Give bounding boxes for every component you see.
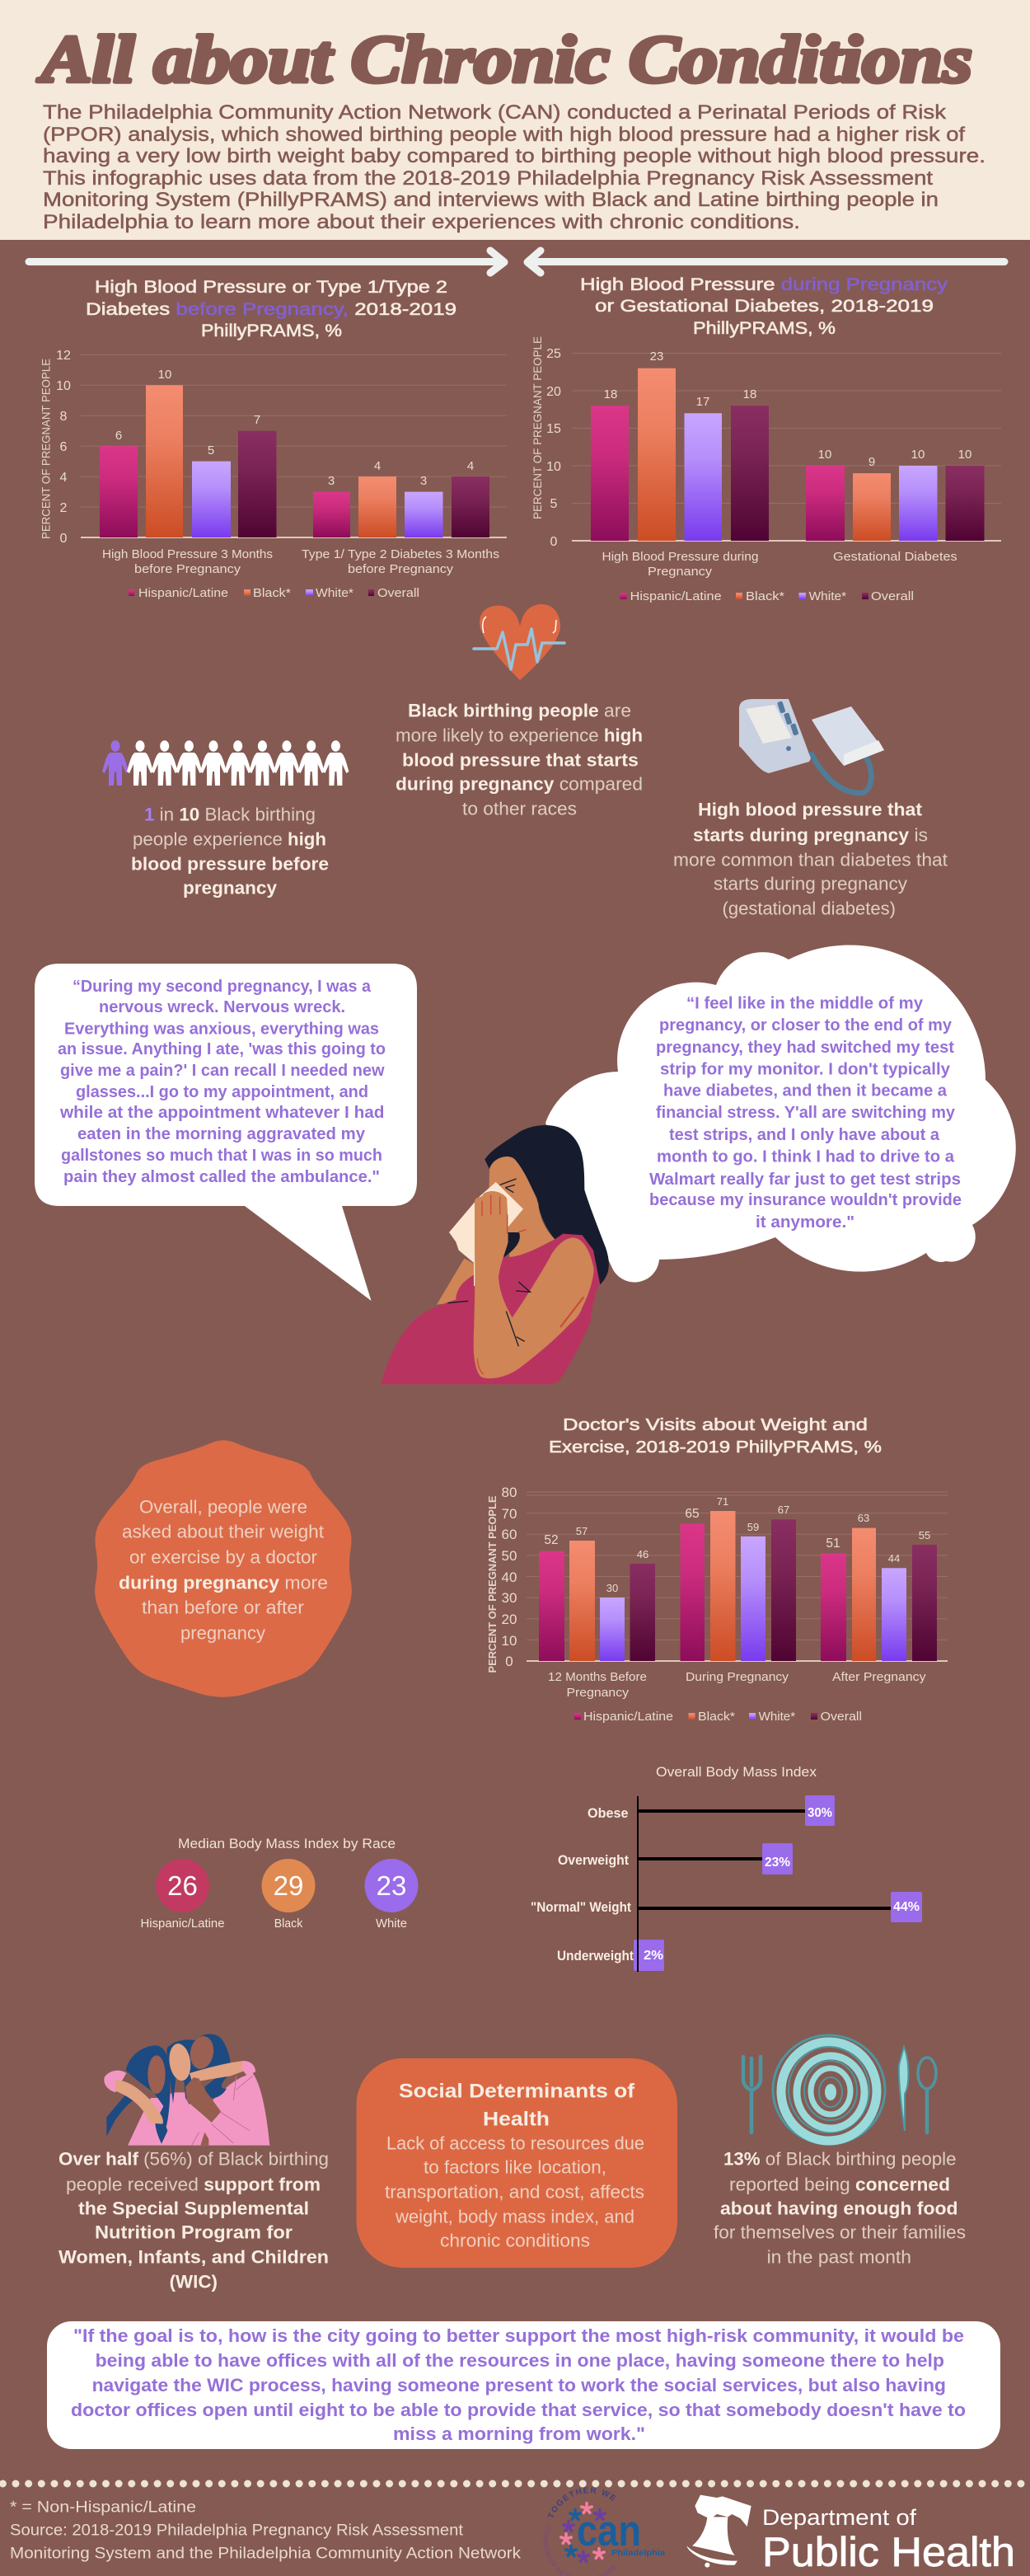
quote text: month to go. I think I had to drive to a bbox=[657, 1147, 955, 1166]
quote text: because my insurance wouldn't provide bbox=[649, 1190, 962, 1209]
badge text: asked about their weight bbox=[122, 1522, 325, 1541]
intro text: having a very low birth weight baby compared to birthing people without high blood pressure. bbox=[43, 145, 986, 167]
legend bbox=[574, 1710, 862, 1724]
intro text: Monitoring System (PhillyPRAMS) and interviews with Black and Latine birthing people in bbox=[43, 189, 939, 211]
heading: Median Body Mass Index by Race bbox=[178, 1836, 396, 1851]
fork bbox=[743, 2057, 761, 2133]
bars: diabetes: 3 bbox=[420, 474, 427, 488]
text: over half received WIC support: Nutrition Program for bbox=[95, 2222, 293, 2242]
logo: Department of Public Health with bell: Public Health bbox=[762, 2529, 1015, 2575]
y axis ticks: 6 bbox=[60, 440, 68, 454]
bars: high blood pressure during pregnancy: 18 bbox=[743, 387, 756, 401]
icon: row of ten people, one highlighted bbox=[102, 740, 349, 786]
chart title: Diabetes before Pregnancy, 2018-2019 bbox=[86, 300, 456, 319]
text: black birthing people high blood pressure during pregnancy: more likely to experience high bbox=[396, 725, 643, 745]
quote text: financial stress. Y'all are switching my bbox=[656, 1103, 956, 1122]
quote text: give me a pain?' I can recall I needed new bbox=[60, 1061, 385, 1080]
y axis ticks: 15 bbox=[546, 422, 561, 436]
panel heading bbox=[399, 2081, 635, 2130]
y axis ticks: 12 bbox=[56, 349, 71, 363]
bars: 12 months before pregnancy: 46 bbox=[637, 1548, 648, 1560]
intro text bbox=[43, 101, 986, 233]
bars: diabetes: 4 bbox=[467, 459, 474, 473]
panel body: weight, body mass index, and bbox=[395, 2206, 634, 2227]
text: over half received WIC support: Over half (56%) of Black birthing bbox=[59, 2148, 329, 2170]
quote text: "If the goal is to, how is the city going to better support the most high-risk community, it would be bbox=[73, 2325, 964, 2346]
intro text: The Philadelphia Community Action Network (CAN) conducted a Perinatal Periods of Risk bbox=[43, 101, 947, 124]
quote text bbox=[71, 2325, 966, 2444]
text: 13% concerned about food: 13% of Black birthing people bbox=[723, 2148, 956, 2170]
badge text: during pregnancy more bbox=[119, 1573, 328, 1593]
logo: CAN Philadelphia: Philadelphia bbox=[611, 2549, 665, 2558]
badge text: Overall, people were bbox=[139, 1497, 307, 1517]
y axis ticks: 30 bbox=[502, 1590, 517, 1606]
legend bbox=[129, 586, 419, 600]
panel body: chronic conditions bbox=[440, 2231, 590, 2250]
logo: Department of Public Health with bell bbox=[686, 2495, 1015, 2575]
text: 13% concerned about food bbox=[714, 2148, 966, 2267]
obese: 30% bbox=[808, 1806, 832, 1820]
overweight: Overweight bbox=[558, 1852, 629, 1868]
circle: Hispanic/Latine: 26 bbox=[167, 1870, 198, 1901]
circle: Hispanic/Latine: Hispanic/Latine bbox=[140, 1917, 224, 1931]
title: All about Chronic Conditions bbox=[36, 21, 972, 96]
bars: gestational diabetes: 10 bbox=[958, 448, 971, 462]
category labels: Gestational Diabetes bbox=[833, 550, 957, 564]
bars: after pregnancy: 63 bbox=[858, 1512, 869, 1524]
icon: plate and cutlery bbox=[743, 2035, 936, 2144]
text: over half received WIC support bbox=[59, 2148, 329, 2292]
chart title: Overall Body Mass Index bbox=[656, 1764, 817, 1780]
quote text: it anymore." bbox=[756, 1213, 854, 1232]
y axis ticks: 10 bbox=[502, 1633, 517, 1649]
chart title bbox=[86, 278, 456, 340]
category labels bbox=[102, 547, 499, 576]
category labels: before Pregnancy bbox=[134, 562, 241, 576]
badge text: than before or after bbox=[142, 1598, 305, 1617]
y axis ticks: 60 bbox=[502, 1527, 517, 1542]
quote text: have diabetes, and then it became a bbox=[663, 1082, 948, 1100]
bars: after pregnancy: 55 bbox=[919, 1529, 930, 1541]
bars: during pregnancy: 65 bbox=[685, 1507, 700, 1521]
y axis ticks bbox=[546, 347, 561, 549]
callout: bottom quote bbox=[47, 2321, 1000, 2449]
legend: White* bbox=[759, 1710, 795, 1724]
chart title bbox=[580, 275, 948, 338]
normal weight: "Normal" Weight bbox=[531, 1899, 631, 1915]
bars: high blood pressure during pregnancy: 23 bbox=[650, 350, 663, 364]
legend: Hispanic/Latine bbox=[630, 589, 722, 603]
chart: high blood pressure during pregnancy or gestational diabetes bbox=[531, 275, 1001, 603]
text: 1 in 10 black birthing people bbox=[131, 805, 329, 899]
overweight: 23% bbox=[765, 1856, 790, 1870]
text: high blood pressure more common than diabetes: starts during pregnancy bbox=[714, 874, 908, 894]
category labels: High Blood Pressure 3 Months bbox=[102, 547, 273, 561]
panel body: Lack of access to resources due bbox=[386, 2133, 644, 2153]
intro text: (PPOR) analysis, which showed birthing people with high blood pressure had a higher risk of bbox=[43, 124, 965, 146]
y axis ticks: 70 bbox=[502, 1506, 517, 1522]
text: 13% concerned about food: reported being concerned bbox=[729, 2175, 950, 2194]
panel body bbox=[385, 2133, 644, 2250]
text: high blood pressure more common than diabetes: starts during pregnancy is bbox=[693, 824, 928, 846]
text: 1 in 10 black birthing people: blood pressure before bbox=[131, 854, 329, 874]
y axis ticks: 10 bbox=[546, 460, 561, 474]
bars: after pregnancy: 51 bbox=[826, 1537, 840, 1551]
panel: median body mass index by race bbox=[140, 1836, 419, 1931]
quote text: pregnancy, or closer to the end of my bbox=[659, 1016, 953, 1035]
y axis ticks bbox=[56, 349, 71, 546]
overweight bbox=[558, 1843, 793, 1875]
y axis ticks: 0 bbox=[505, 1654, 513, 1669]
normal weight bbox=[531, 1892, 922, 1922]
y axis ticks: 25 bbox=[546, 347, 561, 361]
quote text: eaten in the morning aggravated my bbox=[77, 1124, 366, 1143]
y axis ticks: 4 bbox=[60, 471, 68, 485]
bars: 12 months before pregnancy: 30 bbox=[606, 1582, 618, 1594]
quote text: “During my second pregnancy, I was a bbox=[73, 977, 372, 996]
bars: high blood pressure: 7 bbox=[254, 413, 260, 427]
badge text bbox=[119, 1497, 328, 1644]
legend bbox=[620, 589, 914, 603]
quote text: navigate the WIC process, having someone present to work the social services, but also having bbox=[92, 2375, 946, 2395]
chart title: Exercise, 2018-2019 PhillyPRAMS, % bbox=[549, 1438, 882, 1457]
y axis ticks: 40 bbox=[502, 1570, 517, 1585]
quote text: miss a morning from work." bbox=[393, 2424, 645, 2444]
legend: Black* bbox=[746, 589, 784, 603]
chart title: High Blood Pressure during Pregnancy bbox=[580, 275, 948, 294]
badge text: pregnancy bbox=[180, 1622, 266, 1644]
bars: diabetes: 3 bbox=[328, 474, 335, 488]
quote text bbox=[58, 977, 386, 1186]
text: over half received WIC support: the Special Supplemental bbox=[78, 2198, 309, 2219]
text: 13% concerned about food: about having enough food bbox=[720, 2198, 958, 2219]
chart: high blood pressure or diabetes before pregnancy bbox=[40, 278, 507, 600]
circle: Hispanic/Latine bbox=[140, 1859, 224, 1931]
underweight bbox=[557, 1940, 664, 1971]
y axis ticks: 10 bbox=[56, 379, 71, 393]
obese bbox=[588, 1795, 835, 1826]
text: 13% concerned about food: for themselves or their families bbox=[714, 2222, 966, 2242]
bars: 12 months before pregnancy: 57 bbox=[576, 1525, 588, 1537]
quote text: pregnancy, they had switched my test bbox=[656, 1038, 954, 1057]
text: black birthing people high blood pressure during pregnancy: Black birthing people are bbox=[408, 701, 631, 720]
chart title: High Blood Pressure or Type 1/Type 2 bbox=[95, 278, 447, 297]
bars: during pregnancy: 71 bbox=[717, 1495, 728, 1508]
panel body: to factors like location, bbox=[424, 2156, 606, 2178]
icon: blood pressure monitor bbox=[739, 699, 884, 793]
quote text: doctor offices open until eight to be able to provide that service, so that somebody doesn't have to bbox=[71, 2400, 966, 2420]
intro text: This infographic uses data from the 2018-2019 Philadelphia Pregnancy Risk Assessment bbox=[43, 167, 933, 190]
circle: Black: Black bbox=[274, 1917, 303, 1931]
legend: Overall bbox=[871, 589, 914, 603]
illustration: three women embracing bbox=[104, 2034, 269, 2146]
bars: 12 months before pregnancy bbox=[539, 1525, 655, 1661]
y axis ticks: 2 bbox=[60, 501, 68, 515]
quote text bbox=[649, 994, 962, 1232]
chart: overall body mass index bbox=[531, 1764, 922, 1972]
legend: Black* bbox=[253, 586, 291, 600]
y axis ticks: 20 bbox=[502, 1612, 517, 1627]
bars: high blood pressure: 10 bbox=[158, 368, 171, 382]
bars: after pregnancy bbox=[821, 1512, 937, 1661]
chart title bbox=[549, 1416, 882, 1457]
panel body: transportation, and cost, affects bbox=[385, 2181, 644, 2203]
bars: during pregnancy: 59 bbox=[747, 1521, 759, 1533]
text: over half received WIC support: (WIC) bbox=[170, 2272, 218, 2292]
quote text: test strips, and I only have about a bbox=[669, 1125, 940, 1144]
obese: Obese bbox=[588, 1805, 628, 1821]
bars: high blood pressure during pregnancy: 17 bbox=[696, 395, 709, 409]
quote text: strip for my monitor. I don't typically bbox=[660, 1060, 951, 1078]
legend: Black* bbox=[698, 1710, 735, 1724]
y axis ticks: 20 bbox=[546, 385, 561, 399]
quote text: glasses...I go to my appointment, and bbox=[76, 1082, 368, 1101]
legend: White* bbox=[316, 586, 353, 600]
callout: orange badge doctor's visits bbox=[95, 1440, 352, 1697]
icon: heart with pulse bbox=[474, 604, 564, 680]
y axis ticks: 8 bbox=[60, 410, 68, 424]
bars: gestational diabetes: 10 bbox=[818, 448, 831, 462]
quote text: gallstones so much that I was in so much bbox=[61, 1146, 382, 1165]
bars: high blood pressure: 6 bbox=[115, 429, 122, 443]
y axis title: PERCENT OF PREGNANT PEOPLE bbox=[531, 336, 544, 519]
bars: during pregnancy bbox=[681, 1495, 796, 1661]
spoon bbox=[925, 2090, 929, 2133]
footer notes: Monitoring System and the Philadelphia Community Action Network bbox=[10, 2546, 522, 2562]
arrow: right-pointing bbox=[29, 251, 504, 273]
category labels: High Blood Pressure during bbox=[602, 550, 758, 564]
circle: White: 23 bbox=[377, 1870, 406, 1901]
quote text: nervous wreck. Nervous wreck. bbox=[99, 997, 345, 1016]
quote text: Walmart really far just to get test strips bbox=[649, 1170, 961, 1189]
logo: CAN Philadelphia: TOGETHER WE bbox=[547, 2487, 616, 2517]
y axis title: PERCENT OF PREGNANT PEOPLE bbox=[40, 359, 53, 539]
bars: gestational diabetes: 9 bbox=[868, 455, 875, 469]
icon: liberty bell bbox=[686, 2495, 751, 2568]
knife bbox=[899, 2047, 908, 2131]
text: high blood pressure more common than diabetes: High blood pressure that bbox=[698, 800, 923, 819]
text: high blood pressure more common than diabetes bbox=[673, 800, 948, 918]
quote text: being able to have offices with all of the resources in one place, having someone there to help bbox=[96, 2350, 944, 2371]
category labels: During Pregnancy bbox=[686, 1670, 789, 1684]
text: 1 in 10 black birthing people: people experience high bbox=[133, 829, 326, 849]
text: high blood pressure more common than diabetes: more common than diabetes that bbox=[673, 849, 948, 870]
text: black birthing people high blood pressure during pregnancy: blood pressure that starts bbox=[402, 750, 639, 770]
text: 1 in 10 black birthing people: pregnancy bbox=[183, 877, 277, 899]
circle: Black bbox=[262, 1859, 315, 1931]
category labels: 12 Months Before bbox=[548, 1670, 647, 1684]
category labels: After Pregnancy bbox=[832, 1670, 926, 1684]
y axis title: PERCENT OF PREGNANT PEOPLE bbox=[486, 1495, 499, 1673]
text: high blood pressure more common than diabetes: (gestational diabetes) bbox=[722, 899, 896, 918]
intro text: Philadelphia to learn more about their experiences with chronic conditions. bbox=[43, 211, 800, 233]
y axis ticks: 80 bbox=[502, 1485, 517, 1500]
category labels bbox=[548, 1670, 926, 1700]
bars: diabetes bbox=[313, 459, 489, 537]
normal weight: 44% bbox=[893, 1900, 920, 1914]
quote text: an issue. Anything I ate, 'was this going to bbox=[58, 1039, 386, 1058]
bars: after pregnancy: 44 bbox=[888, 1552, 900, 1565]
legend: Hispanic/Latine bbox=[138, 586, 228, 600]
arrow: left-pointing bbox=[527, 251, 1004, 273]
text: black birthing people high blood pressure during pregnancy: during pregnancy compared bbox=[396, 773, 643, 795]
legend: Hispanic/Latine bbox=[583, 1710, 673, 1724]
y axis ticks: 0 bbox=[60, 532, 68, 546]
footer notes: * = Non-Hispanic/Latine bbox=[10, 2499, 196, 2516]
legend: Overall bbox=[821, 1710, 862, 1724]
callout: speech bubble quote bbox=[35, 964, 417, 1301]
bars: gestational diabetes bbox=[806, 448, 984, 541]
y axis ticks: 5 bbox=[550, 497, 558, 511]
bars: 12 months before pregnancy: 52 bbox=[544, 1533, 559, 1547]
logo: CAN Philadelphia bbox=[544, 2487, 666, 2576]
category labels: Type 1/ Type 2 Diabetes 3 Months bbox=[302, 547, 499, 561]
panel heading: Social Determinants of bbox=[399, 2081, 635, 2102]
chart: doctor's visits about weight and exercise bbox=[486, 1416, 948, 1724]
circle: White bbox=[364, 1859, 419, 1931]
chart title: PhillyPRAMS, % bbox=[201, 321, 342, 340]
quote text: “I feel like in the middle of my bbox=[686, 994, 924, 1012]
category labels: before Pregnancy bbox=[348, 562, 454, 576]
footer notes bbox=[10, 2499, 522, 2562]
text: black birthing people high blood pressure during pregnancy bbox=[396, 701, 643, 819]
y axis ticks: 0 bbox=[550, 535, 558, 549]
text: over half received WIC support: people received support from bbox=[66, 2175, 321, 2194]
circle: White: White bbox=[376, 1917, 407, 1931]
quote text: pain they almost called the ambulance." bbox=[63, 1167, 380, 1186]
category labels: Pregnancy bbox=[567, 1686, 630, 1700]
underweight: 2% bbox=[644, 1949, 663, 1963]
bars: high blood pressure bbox=[100, 368, 277, 537]
logo: CAN Philadelphia: can bbox=[577, 2507, 641, 2555]
legend: White* bbox=[809, 589, 846, 603]
y axis ticks: 50 bbox=[502, 1548, 517, 1564]
text: 13% concerned about food: in the past month bbox=[767, 2247, 911, 2267]
bars: diabetes: 4 bbox=[374, 459, 381, 473]
quote text: while at the appointment whatever I had bbox=[59, 1103, 384, 1122]
text: over half received WIC support: Women, Infants, and Children bbox=[59, 2247, 329, 2267]
text: black birthing people high blood pressure during pregnancy: to other races bbox=[462, 798, 577, 819]
badge text: or exercise by a doctor bbox=[129, 1546, 318, 1568]
bars: during pregnancy: 67 bbox=[778, 1504, 789, 1516]
quote text: Everything was anxious, everything was bbox=[64, 1019, 379, 1039]
bars: high blood pressure during pregnancy: 18 bbox=[604, 387, 617, 401]
category labels: Pregnancy bbox=[648, 565, 713, 579]
circle: Black: 29 bbox=[274, 1870, 303, 1901]
bars: high blood pressure: 5 bbox=[208, 443, 214, 457]
bars: high blood pressure during pregnancy bbox=[591, 350, 769, 541]
callout: thought cloud quote bbox=[545, 945, 1016, 1283]
department name: Department of bbox=[762, 2505, 917, 2530]
footer notes: Source: 2018-2019 Philadelphia Pregnancy Risk Assessment bbox=[10, 2522, 464, 2539]
legend: Overall bbox=[377, 586, 419, 600]
panel heading: Health bbox=[483, 2109, 550, 2130]
y axis ticks bbox=[502, 1485, 517, 1669]
header panel bbox=[0, 0, 1030, 240]
panel: social determinants of health bbox=[357, 2058, 677, 2268]
chart title: Doctor's Visits about Weight and bbox=[563, 1416, 868, 1434]
chart title: or Gestational Diabetes, 2018-2019 bbox=[595, 297, 934, 316]
chart title: PhillyPRAMS, % bbox=[693, 319, 836, 338]
illustration: pregnant woman crying into tissue bbox=[381, 1125, 609, 1384]
category labels bbox=[602, 550, 957, 579]
bars: gestational diabetes: 10 bbox=[911, 448, 925, 462]
text: 1 in 10 black birthing people: 1 in 10 Black birthing bbox=[144, 805, 316, 824]
underweight: Underweight bbox=[557, 1948, 634, 1964]
